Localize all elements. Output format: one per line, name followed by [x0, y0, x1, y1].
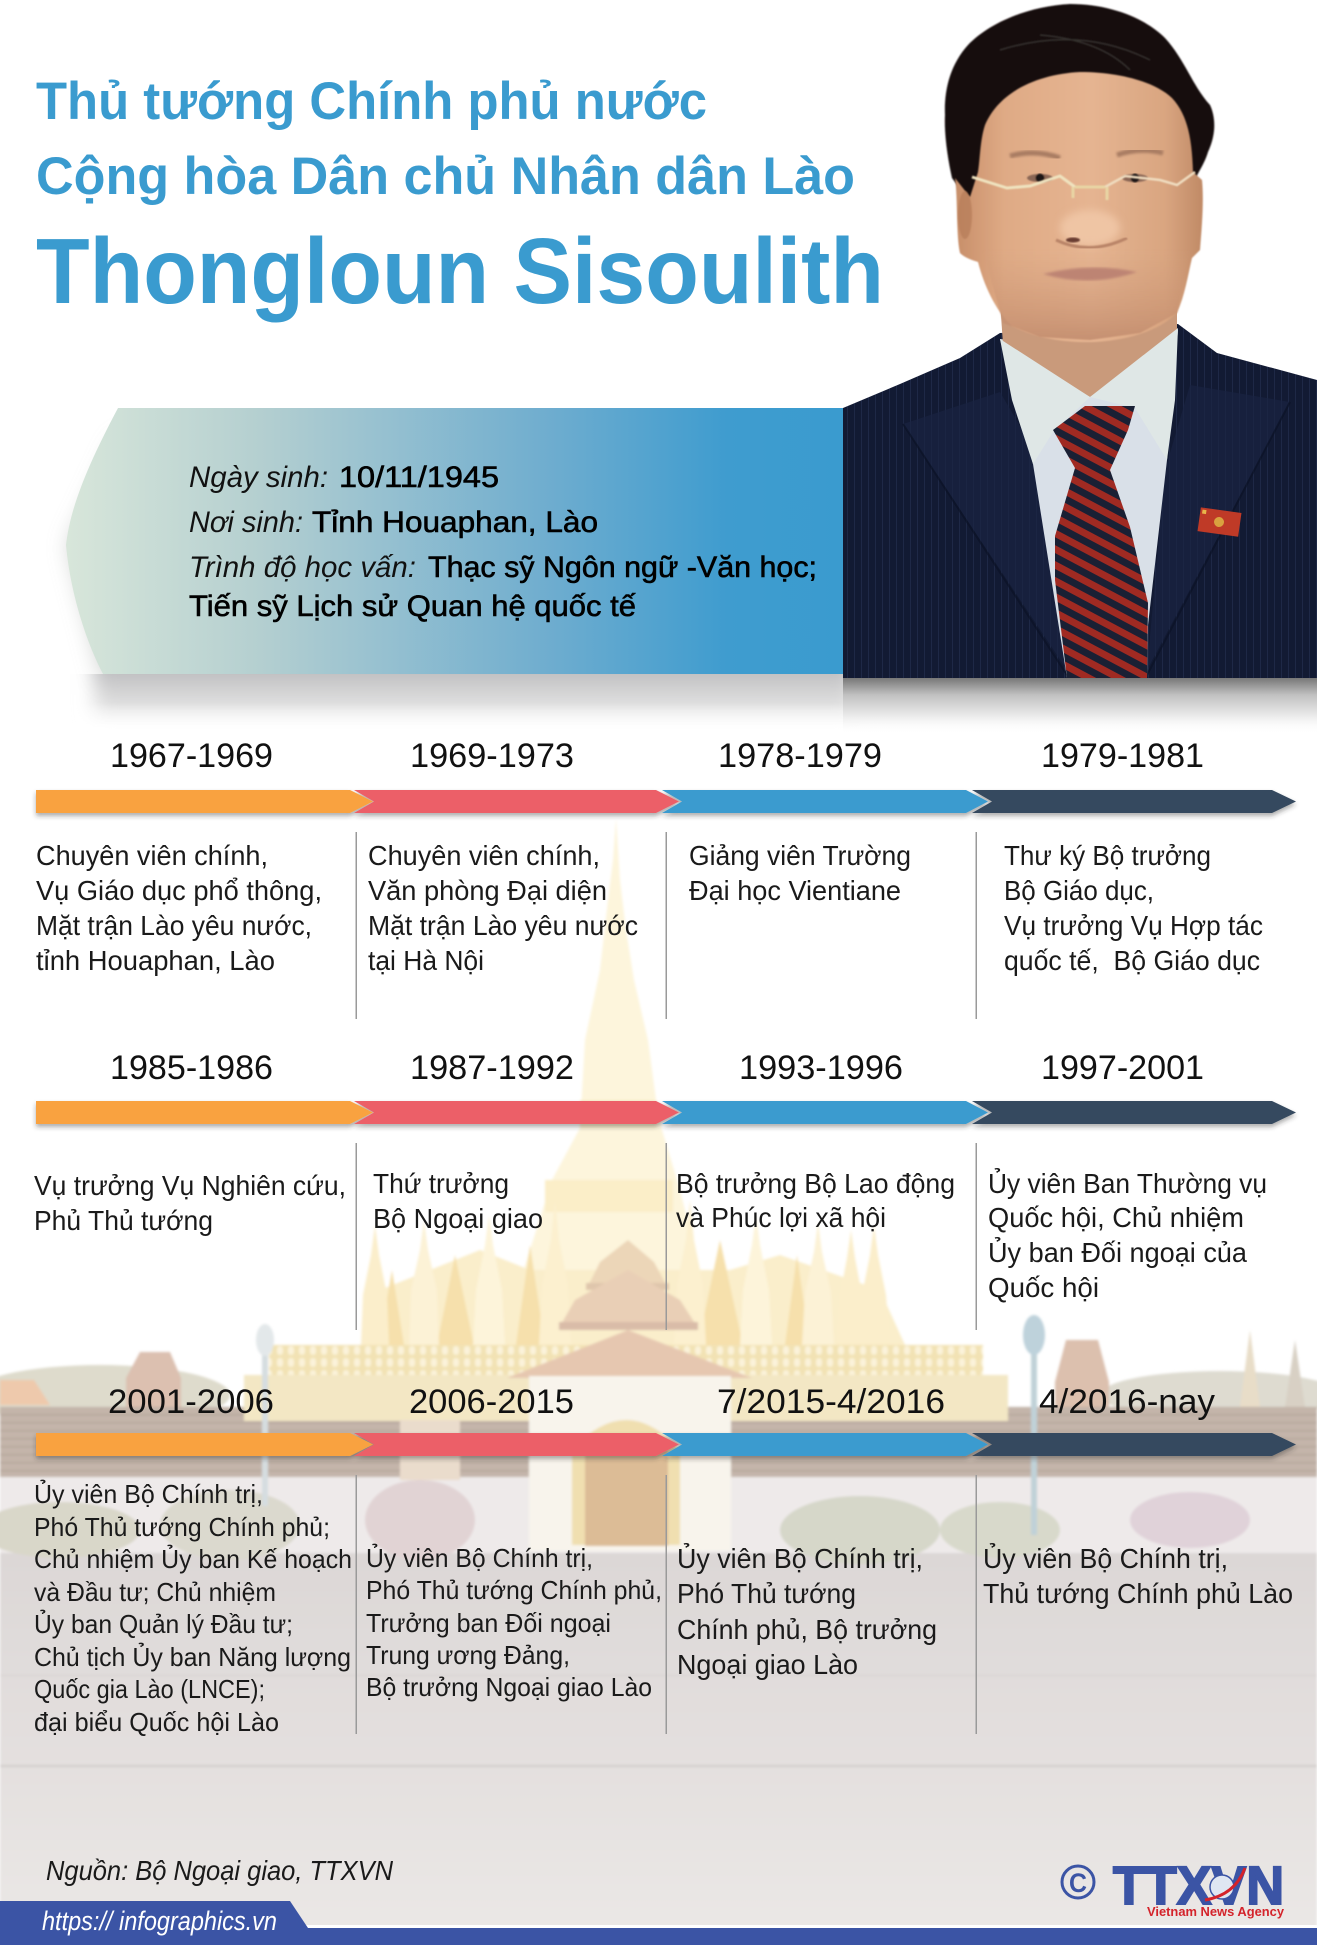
text 2006-2015: Trưởng ban Đối ngoại: [366, 1608, 611, 1638]
text 1978-1979: [689, 840, 911, 906]
footer bar with url tab: [0, 1901, 1317, 1945]
title: [36, 72, 884, 323]
text 7/2015-4/2016: Phó Thủ tướng: [677, 1578, 856, 1609]
text 1979-1981: [1004, 840, 1263, 976]
text 2001-2006: Chủ nhiệm Ủy ban Kế hoạch: [34, 1543, 352, 1574]
text 1987-1992: Thứ trưởng: [373, 1168, 509, 1199]
logo: TTXVN: [1062, 1856, 1285, 1919]
title: Thủ tướng Chính phủ nước: [36, 72, 707, 131]
text 1985-1986: [34, 1170, 346, 1236]
text 1969-1973: [368, 840, 638, 976]
url: https:// infographics.vn: [42, 1906, 277, 1936]
text 1997-2001: Quốc hội: [988, 1272, 1099, 1303]
birth place: Nơi sinh:: [189, 506, 303, 539]
birth place: Tỉnh Houaphan, Lào: [312, 506, 598, 539]
years: 1993-1996: [739, 1049, 903, 1087]
dividers: [356, 832, 977, 1019]
years: [108, 1383, 1215, 1421]
text 2001-2006: Chủ tịch Ủy ban Năng lượng: [34, 1641, 351, 1672]
dividers: [356, 1475, 977, 1734]
text 2001-2006: và Đầu tư; Chủ nhiệm: [34, 1577, 276, 1607]
text 1979-1981: Bộ Giáo dục,: [1004, 875, 1154, 906]
text 4/2016-nay: Thủ tướng Chính phủ Lào: [983, 1578, 1293, 1609]
text 1985-1986: Vụ trưởng Vụ Nghiên cứu,: [34, 1170, 346, 1201]
text 7/2015-4/2016: [677, 1542, 937, 1680]
years: 2006-2015: [409, 1383, 574, 1421]
face: [955, 72, 1203, 342]
suit: [843, 324, 1317, 678]
agency: Vietnam News Agency: [1147, 1904, 1285, 1919]
hair strands: [1000, 35, 1150, 70]
text 1979-1981: Thư ký Bộ trưởng: [1004, 840, 1211, 871]
birth date: 10/11/1945: [339, 461, 499, 494]
text 1967-1969: Vụ Giáo dục phổ thông,: [36, 875, 322, 906]
text 1993-1996: Bộ trưởng Bộ Lao động: [676, 1168, 955, 1199]
text 1978-1979: Đại học Vientiane: [689, 875, 901, 906]
eyebrows: [1010, 150, 1163, 158]
flag pin: [1198, 507, 1241, 537]
education: Thạc sỹ Ngôn ngữ -Văn học;: [428, 551, 817, 584]
photo shadow: [843, 678, 1317, 734]
years: 2001-2006: [108, 1383, 274, 1421]
text 1967-1969: Mặt trận Lào yêu nước,: [36, 910, 312, 941]
arrow bars: [36, 790, 1296, 813]
banner shadow: [70, 440, 855, 732]
text 1967-1969: tỉnh Houaphan, Lào: [36, 945, 275, 976]
text 1969-1973: Văn phòng Đại diện: [368, 875, 607, 906]
years: 1978-1979: [718, 737, 882, 775]
years: 1985-1986: [110, 1049, 273, 1087]
text 2001-2006: đại biểu Quốc hội Lào: [34, 1707, 279, 1737]
info banner: [66, 408, 843, 674]
years: 1987-1992: [410, 1049, 574, 1087]
education: [189, 551, 817, 623]
text 1985-1986: Phủ Thủ tướng: [34, 1205, 213, 1236]
arrow bars: [36, 1101, 1296, 1124]
years: [110, 1049, 1204, 1087]
text 1993-1996: [676, 1168, 955, 1233]
text 2001-2006: Quốc gia Lào (LNCE);: [34, 1674, 265, 1704]
birth date: [189, 461, 499, 494]
text 4/2016-nay: [983, 1542, 1293, 1609]
text 7/2015-4/2016: Chính phủ, Bộ trưởng: [677, 1614, 937, 1645]
text 7/2015-4/2016: Ngoại giao Lào: [677, 1649, 858, 1680]
text 1987-1992: [373, 1168, 543, 1234]
text 7/2015-4/2016: Ủy viên Bộ Chính trị,: [677, 1542, 923, 1574]
years: 1979-1981: [1041, 737, 1204, 775]
text 1997-2001: Quốc hội, Chủ nhiệm: [988, 1202, 1244, 1233]
text 1997-2001: Ủy ban Đối ngoại của: [988, 1236, 1247, 1268]
title: Thongloun Sisoulith: [36, 219, 884, 323]
hair back: [945, 4, 1214, 205]
mouth: [1043, 267, 1137, 281]
text 1997-2001: Ủy viên Ban Thường vụ: [988, 1167, 1267, 1199]
timeline row 2: [34, 1049, 1296, 1330]
years: 1967-1969: [110, 737, 273, 775]
education: Tiến sỹ Lịch sử Quan hệ quốc tế: [189, 590, 636, 623]
text 2006-2015: Phó Thủ tướng Chính phủ,: [366, 1575, 662, 1605]
timeline row 3: [34, 1383, 1296, 1737]
text 2001-2006: Phó Thủ tướng Chính phủ;: [34, 1512, 330, 1542]
text 2006-2015: Trung ương Đảng,: [366, 1640, 570, 1670]
education: Trình độ học vấn:: [189, 551, 416, 584]
text 2001-2006: [34, 1478, 352, 1737]
shirt and neck: [1000, 330, 1178, 678]
birth place: [189, 506, 598, 539]
years: 4/2016-nay: [1039, 1383, 1215, 1421]
globe: [1205, 1868, 1245, 1900]
text 2006-2015: Bộ trưởng Ngoại giao Lào: [366, 1672, 652, 1702]
text 1997-2001: [988, 1167, 1267, 1303]
source note: Nguồn: Bộ Ngoại giao, TTXVN: [46, 1855, 394, 1886]
wordmark: TTXVN: [1113, 1856, 1284, 1916]
title: Cộng hòa Dân chủ Nhân dân Lào: [36, 147, 855, 206]
text 1967-1969: [36, 840, 322, 976]
text 4/2016-nay: Ủy viên Bộ Chính trị,: [983, 1542, 1228, 1574]
text 2006-2015: [366, 1542, 662, 1702]
text 1969-1973: Mặt trận Lào yêu nước: [368, 910, 638, 941]
text 1969-1973: tại Hà Nội: [368, 945, 484, 976]
text 1969-1973: Chuyên viên chính,: [368, 840, 600, 871]
background: faded That Luang temple: [0, 818, 1317, 1945]
text 2006-2015: Ủy viên Bộ Chính trị,: [366, 1542, 593, 1573]
fins between small stupas: [379, 1240, 864, 1345]
eyes: [1027, 174, 1148, 182]
text 1979-1981: Vụ trưởng Vụ Hợp tác: [1004, 910, 1263, 941]
copyright mark: C: [1069, 1868, 1087, 1898]
nose: [1056, 210, 1127, 248]
text 1993-1996: và Phúc lợi xã hội: [676, 1202, 886, 1233]
timeline row 1: [36, 737, 1296, 1019]
tie: [1053, 406, 1148, 678]
birth date: Ngày sinh:: [189, 461, 328, 494]
text 1967-1969: Chuyên viên chính,: [36, 840, 268, 871]
years: 1997-2001: [1041, 1049, 1204, 1087]
years: 1969-1973: [410, 737, 574, 775]
dividers: [356, 1143, 977, 1330]
glasses: [972, 172, 1195, 200]
arrow bars: [36, 1433, 1296, 1456]
text 2001-2006: Ủy ban Quản lý Đầu tư;: [34, 1608, 293, 1639]
years: 7/2015-4/2016: [717, 1383, 945, 1421]
copyright mark: [1062, 1866, 1094, 1898]
portrait photo: [843, 4, 1317, 678]
text 1978-1979: Giảng viên Trường: [689, 840, 911, 871]
text 1979-1981: quốc tế, Bộ Giáo dục: [1004, 945, 1260, 976]
text 2001-2006: Ủy viên Bộ Chính trị,: [34, 1478, 263, 1509]
text 1987-1992: Bộ Ngoại giao: [373, 1203, 543, 1234]
years: [110, 737, 1204, 775]
